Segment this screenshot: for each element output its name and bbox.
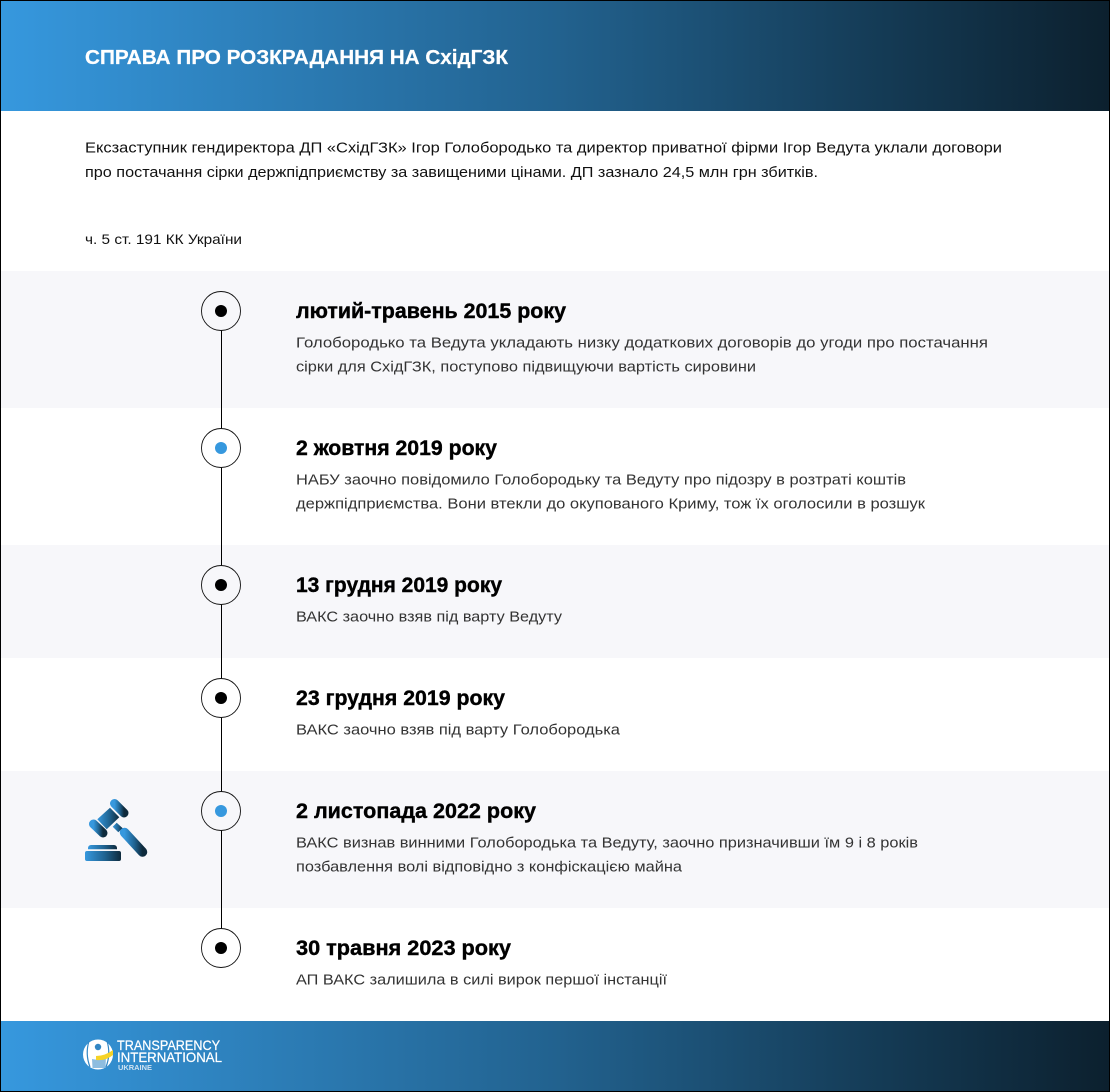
- timeline event: 13 грудня 2019: [202, 566, 563, 626]
- logo: Transparency International Ukraine: INTERNATIONAL: [117, 1049, 222, 1065]
- timeline event: 13 грудня 2019: ВАКС заочно взяв під варту Ведуту: [296, 608, 563, 626]
- timeline event: 30 травня 2023: 30 травня 2023 року: [296, 936, 511, 960]
- intro text: [85, 140, 1002, 181]
- timeline event: 2 листопада 2022: позбавлення волі відповідно з конфіскацією майна: [296, 858, 683, 876]
- timeline event: 2 листопада 2022: ВАКС визнав винними Голобородька та Ведуту, заочно призначивши їм 9 і 8 років: [296, 834, 918, 852]
- timeline event: 2 жовтня 2019: НАБУ заочно повідомило Голобородьку та Ведуту про підозру в розтраті коштів: [296, 472, 906, 488]
- intro text: Ексзаступник гендиректора ДП «СхідГЗК» Ігор Голобородько та директор приватної фірми Ігор Ведута уклали договори: [85, 140, 1002, 156]
- logo: Transparency International Ukraine: [83, 1037, 222, 1072]
- logo: Transparency International Ukraine: UKRAINE: [118, 1063, 152, 1072]
- timeline event: 2 листопада 2022: 2 листопада 2022 року: [296, 799, 536, 823]
- timeline event: лютий-травень 2015: сірки для СхідГЗК, поступово підвищуючи вартість сировини: [296, 358, 756, 376]
- icon: gavel: [85, 804, 142, 861]
- title: СПРАВА ПРО РОЗКРАДАННЯ НА СхідГЗК: [85, 47, 509, 69]
- timeline event: 30 травня 2023: [202, 928, 668, 988]
- logo: Transparency International Ukraine: TRANSPARENCY: [117, 1037, 221, 1053]
- timeline event: 23 грудня 2019: [202, 678, 621, 738]
- intro text: про постачання сірки держпідприємству за завищеними цінами. ДП зазнало 24,5 млн грн збитків.: [85, 164, 818, 181]
- timeline event: 2 жовтня 2019: держпідприємства. Вони втекли до окупованого Криму, тож їх оголосили в розшук: [296, 496, 925, 512]
- timeline event: 30 травня 2023: АП ВАКС залишила в силі вирок першої інстанції: [296, 972, 668, 988]
- timeline event: 2 листопада 2022: [202, 792, 918, 876]
- footer banner: [1, 1021, 1109, 1091]
- timeline event: лютий-травень 2015: [202, 292, 988, 376]
- timeline line: [220, 311, 222, 948]
- header banner: [1, 1, 1109, 111]
- timeline event: 13 грудня 2019: 13 грудня 2019 року: [296, 573, 502, 597]
- timeline event: 23 грудня 2019: 23 грудня 2019 року: [296, 686, 505, 710]
- row backgrounds: [1, 271, 1109, 908]
- timeline event: 23 грудня 2019: ВАКС заочно взяв під варту Голобородька: [296, 722, 621, 738]
- timeline event: 2 жовтня 2019: 2 жовтня 2019 року: [296, 436, 497, 460]
- timeline event: лютий-травень 2015: Голобородько та Ведута укладають низку додаткових договорів до угоди про постачання: [296, 334, 988, 352]
- timeline event: лютий-травень 2015: лютий-травень 2015 року: [296, 299, 566, 323]
- timeline event: 2 жовтня 2019: [202, 428, 925, 512]
- legal article: ч. 5 ст. 191 КК України: [85, 231, 242, 247]
